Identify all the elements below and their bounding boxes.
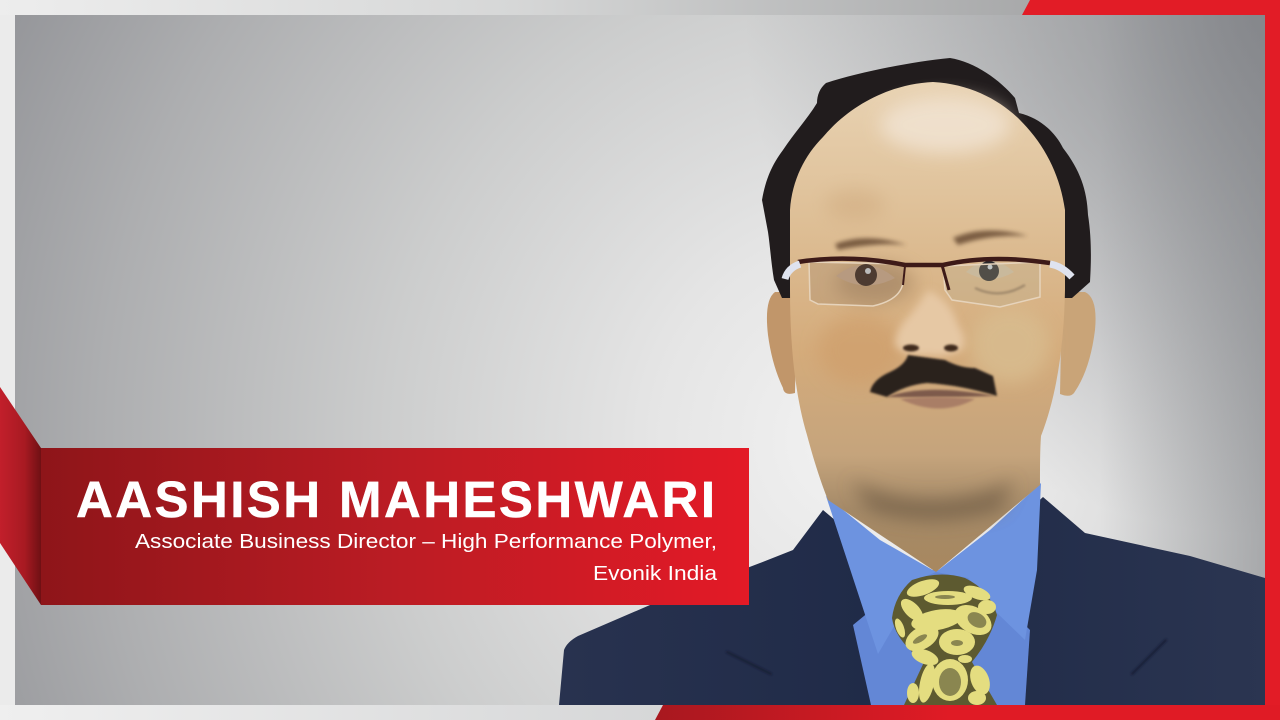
jacket lapel lines: [727, 640, 1166, 674]
eyes: [836, 261, 1025, 293]
eyeglasses: [785, 259, 1072, 307]
job title: Associate Business Director – High Performance Polymer,: [135, 530, 717, 553]
name banner: [0, 387, 749, 605]
banner fold: [0, 387, 41, 605]
necktie: [892, 574, 997, 705]
nose: [895, 290, 964, 356]
lips: [887, 390, 995, 408]
shirt collar left: [826, 496, 936, 654]
top grey strip: [0, 0, 1040, 15]
face and neck: [790, 82, 1065, 572]
mustache: [870, 355, 997, 397]
red frame: top and right edge: [1022, 0, 1280, 720]
portrait of the speaker: [559, 58, 1265, 705]
shirt collar right: [936, 483, 1041, 640]
speaker name: AASHISH MAHESHWARI: [76, 471, 715, 528]
suit jacket: [559, 497, 1265, 705]
shirt: [826, 483, 1041, 705]
hair: [762, 58, 1091, 298]
bottom light strip: [0, 705, 670, 720]
eyebrows: [835, 230, 1028, 250]
ears: [767, 292, 1096, 396]
banner body: [41, 448, 749, 605]
facial shading: [818, 97, 1050, 520]
red frame: bottom edge: [655, 705, 1280, 720]
company: Evonik India: [593, 562, 718, 585]
